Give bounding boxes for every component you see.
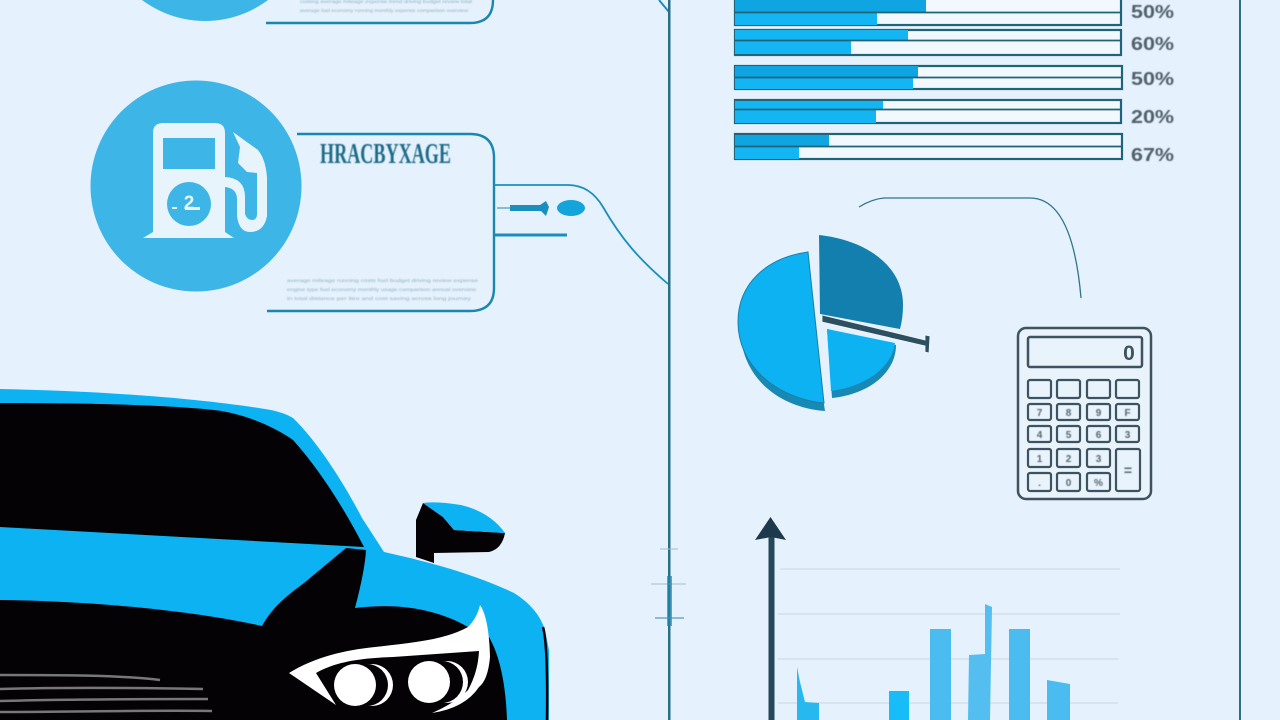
pie needle (822, 315, 930, 353)
chart: exploded pie (738, 235, 930, 411)
bar row 4 (735, 100, 1174, 127)
car windshield (0, 403, 364, 547)
bar row 5 (735, 134, 1174, 165)
calculator key labels: % (1094, 478, 1103, 489)
calculator key labels: = (1124, 462, 1132, 478)
calculator keys (1028, 380, 1140, 491)
pie slice: large left (742, 345, 825, 411)
calculator key labels: 1 (1037, 454, 1043, 465)
chart gridlines (778, 569, 1120, 703)
bar row 3: 50% (1131, 69, 1174, 89)
calculator key labels: 4 (1037, 430, 1043, 441)
panel: fuel efficiency card (90, 80, 494, 311)
chart: vertical bars with axis arrow (755, 517, 1120, 720)
calculator display (1028, 337, 1142, 367)
divider: right vertical rule (1239, 0, 1241, 720)
bar row 2 (735, 30, 1174, 55)
calculator key labels: 7 (1037, 408, 1043, 419)
icon: calculator (1018, 328, 1151, 499)
calculator display: 0 (1123, 342, 1135, 365)
calculator key labels (1037, 408, 1132, 489)
calculator key labels: 8 (1066, 408, 1072, 419)
divider: central vertical rule (651, 0, 686, 720)
chart: horizontal progress bars (735, 0, 1174, 165)
car grille slats (0, 675, 212, 712)
icon: fuel pump in circle (90, 80, 302, 292)
card body text: engine type fuel economy monthly usage comparison annual overview (287, 287, 477, 292)
car body (0, 389, 549, 720)
icon: fuel pump in circle: 2 (184, 193, 194, 214)
chart bars (797, 604, 1070, 720)
calculator key labels: 2 (1066, 454, 1072, 465)
pie slice: lower right (827, 329, 896, 398)
calculator key labels: 3 (1096, 454, 1102, 465)
bar row 4: 20% (1131, 107, 1174, 127)
card outline (267, 134, 494, 311)
calculator key labels: 0 (1066, 478, 1072, 489)
car fender edge (543, 627, 547, 720)
bar row 5: 67% (1131, 145, 1174, 165)
connector: card to right panel (494, 0, 669, 284)
card body text: in total distance per litre and cost saving across long journey (287, 296, 472, 301)
panel: top fuel card (cropped) (100, 0, 493, 23)
card body text: average mileage running costs fuel budget driving review expense (287, 278, 479, 283)
panel: top fuel card (cropped): average fuel economy running monthly expense comparison overview (300, 8, 469, 13)
bar row 1: 50% (1131, 2, 1174, 22)
car hood and front fascia (0, 548, 507, 720)
calculator key labels: 9 (1096, 408, 1102, 419)
calculator key labels: 5 (1066, 430, 1072, 441)
chart axis arrow (755, 517, 786, 720)
calculator key labels: 3 (1125, 430, 1131, 441)
illustration: black and blue sports car (0, 389, 549, 720)
card body text (287, 278, 479, 301)
calculator key labels: . (1038, 478, 1041, 489)
pie slice: dark top right (819, 235, 903, 329)
calculator key labels: 6 (1096, 430, 1102, 441)
car headlight (289, 605, 490, 713)
bar row 3 (735, 66, 1174, 89)
connector: curved line to calculator (859, 198, 1081, 298)
calculator key labels: F (1124, 408, 1131, 419)
bar row 2: 60% (1131, 34, 1174, 54)
heading: HRACBYXAGE (320, 139, 451, 170)
bar row 1 (735, 0, 1174, 25)
car side mirror (416, 502, 505, 563)
